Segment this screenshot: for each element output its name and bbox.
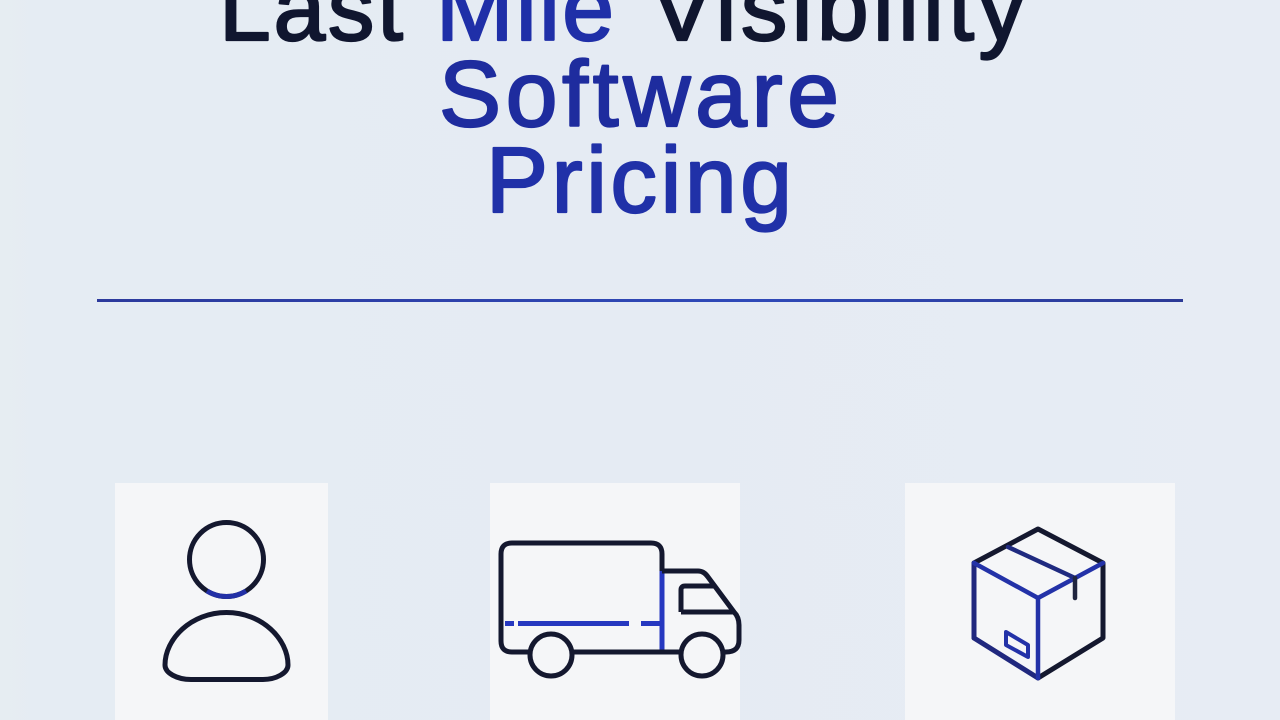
- divider rule: [97, 299, 1183, 302]
- panel: package card: [905, 483, 1175, 720]
- icon: front wheel: [681, 634, 723, 676]
- icon: package box: [974, 529, 1103, 678]
- title line 2: Software: [439, 42, 839, 146]
- panel: person card: [115, 483, 328, 720]
- icon: rear wheel: [530, 634, 572, 676]
- icon: person: [165, 522, 288, 680]
- title line 1: [219, 0, 1026, 60]
- icon: delivery truck: [501, 543, 739, 676]
- panel: truck card: [490, 483, 740, 720]
- title line 3: Pricing: [486, 128, 792, 232]
- title: [219, 0, 1026, 232]
